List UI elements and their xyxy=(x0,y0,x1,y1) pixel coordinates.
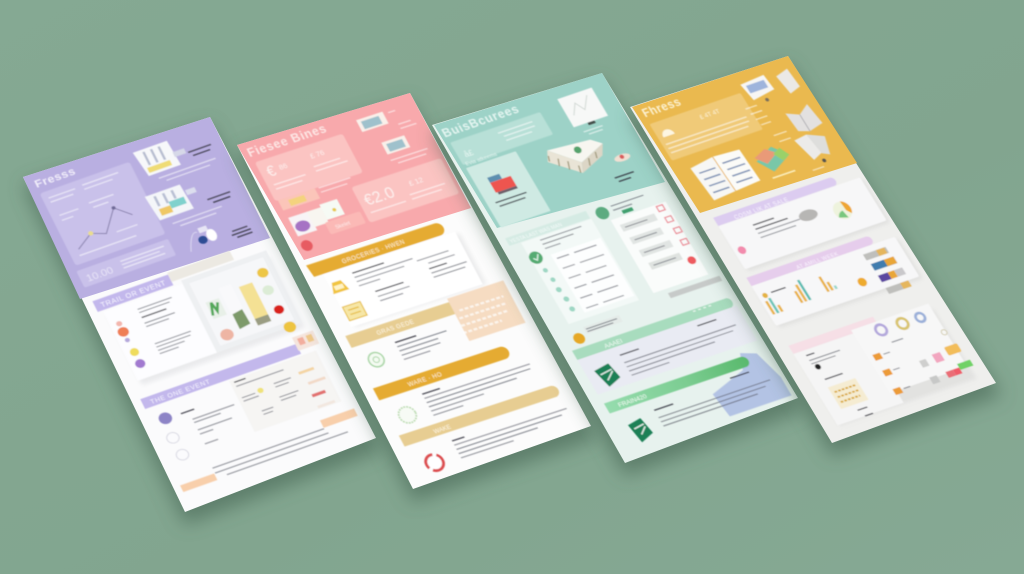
panel: intro: £ 4T 4T xyxy=(698,108,722,121)
icon: green leaf xyxy=(593,362,623,389)
text beside tags xyxy=(878,338,929,389)
panel: chart card xyxy=(463,146,551,228)
card 3 content xyxy=(439,72,792,451)
card 1 content xyxy=(28,118,364,492)
header band xyxy=(237,93,471,260)
card 4 content xyxy=(639,57,985,427)
icons: jars xyxy=(182,212,252,253)
sheet base xyxy=(432,73,798,463)
illustration: cards xyxy=(287,199,348,236)
section band: lavender: COSM LIK AT SALE xyxy=(733,197,790,221)
panel: list left xyxy=(520,219,639,324)
panel: stats one xyxy=(255,134,363,201)
section heading: left panel xyxy=(505,211,590,246)
panel: intro notes xyxy=(718,177,890,272)
text: long body xyxy=(422,360,539,415)
thumbnail: lower xyxy=(381,131,430,165)
peach block xyxy=(445,280,526,342)
panel: bar charts xyxy=(751,236,923,328)
panel: stats one: € xyxy=(264,163,280,181)
thumbnail: swatches xyxy=(292,330,319,351)
text: body two xyxy=(651,367,775,426)
section heading: trail or event: TRAIL OR EVENT xyxy=(99,279,168,309)
section band: gold one: GROCERIES · HWEN xyxy=(341,238,406,265)
section band: lavender xyxy=(713,176,839,227)
card 4: yellow sheet xyxy=(630,56,1002,456)
caption xyxy=(615,172,636,182)
photo: jars and bars xyxy=(181,250,305,358)
illustration: colour blocks xyxy=(145,180,203,221)
icon: gold building xyxy=(328,279,349,294)
title: Fiesee Bines xyxy=(245,121,329,160)
text: last body xyxy=(452,404,573,458)
card 3: teal sheet xyxy=(432,72,804,476)
panel: stats two: €2.0 xyxy=(361,185,398,209)
text: right column xyxy=(229,350,342,432)
header band xyxy=(434,73,665,228)
illustration: open pages xyxy=(784,103,824,135)
section band: gold two: WARE · HO xyxy=(407,371,444,388)
icon: wreath xyxy=(396,405,419,425)
orange badge with note xyxy=(569,315,627,345)
title: Fresss xyxy=(33,166,78,190)
section heading: the one event: THE ONE EVENT xyxy=(149,379,212,406)
blue patch xyxy=(697,346,792,418)
icon: green badge xyxy=(366,351,387,369)
section heading: trail or event xyxy=(92,275,173,312)
panel: text and icons xyxy=(103,254,305,386)
header band xyxy=(632,56,857,213)
icons: orange tags xyxy=(871,353,904,395)
panel: line chart xyxy=(40,162,166,266)
icon: gold sheet xyxy=(342,301,367,321)
band: header panel: å£ xyxy=(462,147,476,159)
title: BuisBcurees xyxy=(439,102,522,140)
illustration: colour stack xyxy=(751,143,798,180)
section band: gold two xyxy=(373,345,512,400)
icons: steps xyxy=(155,411,192,462)
icon: red ring xyxy=(423,452,447,473)
white labels xyxy=(746,97,824,179)
rings xyxy=(873,310,927,337)
chip xyxy=(325,211,366,235)
panel: stats one: £ 76 xyxy=(308,148,326,160)
thumbnail: top xyxy=(356,104,416,140)
illustration: document stack xyxy=(133,137,190,177)
illustration: open book xyxy=(688,147,762,202)
sheet base xyxy=(237,93,591,489)
chip: Skelet xyxy=(334,220,352,231)
mini bars xyxy=(298,365,337,409)
grey band xyxy=(668,276,722,298)
section band: green two xyxy=(604,355,751,414)
panel: bottom xyxy=(791,303,977,426)
footer tag: left xyxy=(180,473,217,492)
footer text xyxy=(213,422,348,478)
panel: intro xyxy=(649,93,763,161)
panel: list right xyxy=(593,187,708,296)
chips: bottom right xyxy=(907,327,976,384)
section band: pink xyxy=(788,317,878,354)
panel: stats one: 86 xyxy=(277,161,289,172)
panel: stats two xyxy=(351,158,460,223)
section heading: left panel: YESTA LAST WAS MAN xyxy=(509,222,564,245)
section band: green two: FRAIN420 xyxy=(617,393,649,409)
band behind section heading xyxy=(167,251,234,282)
illustration: fan xyxy=(793,129,838,167)
icon: green leaf two xyxy=(627,417,656,443)
panel: chart card: Evia atkeems xyxy=(465,152,499,168)
section band: mauve xyxy=(746,235,875,287)
section band: tan two: WAKE xyxy=(433,424,452,436)
sheet base xyxy=(630,56,996,443)
icon: orange coin xyxy=(856,277,869,288)
section band: green one xyxy=(572,297,735,360)
chips: colour legend xyxy=(863,246,913,294)
sheet base xyxy=(23,117,376,512)
panel: body text one xyxy=(577,306,757,395)
card 2 content xyxy=(244,94,581,477)
section band: tan one: GRAS GEDE xyxy=(375,319,416,337)
card 2: pink sheet xyxy=(237,93,597,502)
band: header panel xyxy=(450,112,553,165)
panel: stat: 10.00 xyxy=(84,265,115,284)
panel: autonomous text xyxy=(323,231,487,328)
section band: tan two xyxy=(399,384,561,447)
text: resource xyxy=(395,326,453,360)
label: illustration two xyxy=(168,192,237,228)
footer tag: right xyxy=(320,408,358,428)
title: Fhress xyxy=(639,95,684,120)
panel: stats two: £ 12 xyxy=(407,175,425,188)
band: tickets xyxy=(278,177,355,211)
illustration: monitor xyxy=(557,87,614,137)
illustration: table xyxy=(542,128,632,183)
section band: gold one xyxy=(306,222,447,277)
illustration: monitor xyxy=(739,74,779,106)
section heading: the one event xyxy=(140,344,301,409)
section band: green one: AAAEI xyxy=(603,338,624,350)
section band: mauve: AT AMILL WEEK xyxy=(795,251,840,271)
text: steps xyxy=(181,396,246,447)
icon: red bowl xyxy=(299,239,315,252)
illustration: cup xyxy=(774,68,802,95)
panel: stat xyxy=(76,239,176,288)
illustration: gold poster xyxy=(828,378,876,421)
label: illustration one xyxy=(152,144,220,182)
header band xyxy=(23,117,270,299)
section band: tan one xyxy=(345,299,464,348)
card 1: lavender sheet xyxy=(23,117,382,525)
